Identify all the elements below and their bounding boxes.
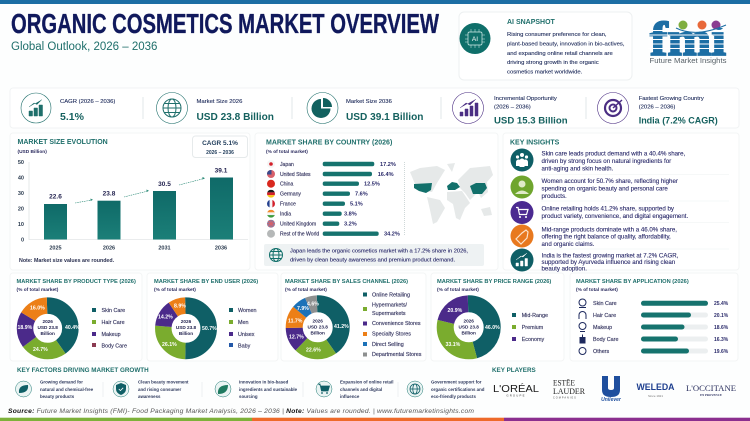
note: Note: Market size values are rounded.: [19, 258, 115, 264]
panel: application: [570, 273, 738, 361]
legend: Convenience Stores: [372, 321, 421, 327]
insight: women: [510, 176, 678, 200]
insight: India: supported by Ayurveda influence and rising clean: [542, 259, 676, 266]
KPI: fastest growing country: Fastest Growing Country: [639, 96, 704, 102]
donut chart: 46.0%: [485, 325, 500, 331]
icon: AI chip: AI: [472, 36, 478, 43]
KPI: incremental opportunity: [452, 92, 568, 126]
factor: government support: eco-friendly products: [431, 394, 476, 399]
donut chart: 20.9%: [448, 308, 463, 314]
donut chart: 50.7%: [202, 326, 217, 332]
legend: Makeup: [102, 332, 121, 338]
donut chart: USD 23.8: [176, 325, 197, 330]
legend: [92, 308, 127, 350]
insight: India: beauty adoption.: [542, 266, 587, 272]
legend: Skin Care: [102, 308, 125, 314]
factor: innovation: Innovation in bio-based: [239, 380, 289, 384]
legend: Economy: [522, 337, 544, 343]
bar chart: 2031: [158, 246, 171, 252]
bar chart: 0: [21, 238, 24, 244]
application labels: Skin Care: [593, 301, 617, 307]
donut chart: 11.7%: [288, 318, 303, 324]
KPI: CAGR: CAGR (2026 – 2036): [60, 99, 115, 105]
factor: online expansion: Expansion of online retail: [340, 380, 393, 384]
panel: sales channel: [281, 273, 426, 361]
donut chart: USD 23.8: [38, 325, 58, 330]
donut chart: [18, 306, 80, 353]
application values: [714, 301, 729, 355]
insight: mid-range: [510, 224, 677, 248]
unit label: (% of total market): [437, 287, 479, 293]
panel: key players: [492, 367, 736, 403]
donut chart: [158, 304, 217, 351]
bar chart: 2025: [49, 246, 62, 252]
factor: clean beauty: awareness: [138, 394, 161, 399]
country values: [344, 162, 400, 238]
factor: clean beauty: [113, 380, 189, 399]
country values: 3.2%: [344, 222, 357, 228]
application values: 16.3%: [714, 337, 729, 343]
CAGR callout: 2026 – 2036: [206, 150, 234, 156]
logo: L'Oreal: L'ORÉAL: [493, 382, 539, 395]
legend: Mid-Range: [522, 313, 548, 319]
legend: Departmental Stores: [372, 352, 422, 358]
KPI: market size 2036: USD 39.1 Billion: [346, 112, 423, 123]
KPI: market size 2036: Market Size 2036: [346, 99, 393, 105]
country values: 12.5%: [364, 182, 380, 188]
top bar: [0, 0, 750, 4]
donut chart: 8.9%: [174, 304, 186, 310]
insight: skin care: driven by strong focus on natural ingredients for: [542, 158, 671, 165]
legend: Premium: [522, 325, 544, 331]
application labels: Others: [593, 349, 609, 355]
bar chart: [18, 160, 248, 252]
CAGR callout: CAGR 5.1%: [202, 140, 238, 147]
heading: KEY INSIGHTS: [510, 140, 560, 146]
bar chart: 20: [18, 206, 24, 212]
text: AI snapshot summary: driving strong growth in the organic: [507, 60, 599, 66]
logo: Estee Lauder: LAUDER: [553, 386, 585, 396]
bar chart: 2036: [215, 246, 227, 252]
KPI: incremental opportunity: USD 15.3 Billion: [494, 116, 568, 126]
unit label: (% of total market): [285, 287, 327, 293]
application values: 20.1%: [714, 313, 729, 319]
country values: 17.2%: [380, 162, 396, 168]
donut chart: 26.1%: [162, 342, 177, 348]
unit label: (% of total market): [16, 287, 59, 293]
bar chart: 30.5: [158, 181, 171, 188]
heading: MARKET SHARE BY SALES CHANNEL (2026): [285, 279, 408, 285]
country labels: United States: [280, 172, 311, 178]
insight: skin care: anti-aging and skin health.: [542, 166, 613, 172]
donut chart: 33.1%: [446, 342, 461, 348]
panel: market size evolution: [10, 133, 250, 270]
panel: key insights: [503, 133, 739, 272]
text: AI snapshot summary: and expanding online retail channels are: [507, 51, 614, 57]
donut chart: Billion: [462, 330, 476, 336]
logo: L'Occitane: EN PROVENCE: [700, 393, 722, 397]
country labels: France: [280, 202, 296, 208]
insight: skin care: [510, 148, 685, 172]
heading: MARKET SHARE BY PRICE RANGE (2026): [437, 279, 551, 285]
donut chart: [445, 304, 500, 351]
KPI: market size 2026: Market Size 2026: [196, 99, 243, 105]
country labels: United Kingdom: [280, 222, 316, 228]
heading: market size evolution: MARKET SIZE EVOLUTION: [18, 139, 108, 146]
legend: Unisex: [238, 332, 255, 338]
logo: Estee Lauder: ESTĒE: [553, 378, 575, 388]
CAGR callout: [192, 136, 248, 158]
donut chart: USD 23.8: [459, 324, 479, 330]
legend: [229, 308, 256, 350]
factor: innovation: sourcing: [239, 394, 258, 399]
KPI: fastest growing country: India (7.2% CAGR): [639, 116, 718, 126]
donut chart: Billion: [41, 331, 55, 336]
unit label: (% of total market): [576, 287, 618, 293]
insight: skin care: Skin care leads product demand with a 40.4% share,: [542, 150, 685, 158]
KPI: market size 2026: USD 23.8 Billion: [196, 112, 274, 123]
country labels: Japan: [280, 162, 294, 168]
factor: natural demand: [16, 380, 94, 399]
KPI: fastest growing country: (2026 – 2036): [639, 104, 675, 110]
heading: AI snapshot: AI SNAPSHOT: [507, 19, 556, 26]
KPI: CAGR: [21, 93, 115, 123]
text: AI snapshot summary: plant-based beauty, innovation in bio-actives,: [507, 42, 625, 48]
bar chart: 22.6: [49, 194, 62, 200]
heading: KEY FACTORS DRIVING MARKET GROWTH: [17, 367, 149, 374]
KPI: CAGR: 5.1%: [60, 111, 85, 123]
donut chart: 22.6%: [306, 348, 321, 354]
heading: KEY PLAYERS: [492, 367, 536, 374]
bar chart: 23.8: [103, 190, 116, 198]
footer color bar: [0, 418, 750, 421]
legend: [512, 313, 548, 343]
bar chart: 39.1: [215, 168, 228, 174]
text: AI snapshot summary: Rising consumer preference for clean,: [507, 32, 607, 38]
insight: mid-range: offering the right balance of quality, affordability,: [542, 234, 671, 240]
logo: Future Market Insights: fmi: [650, 13, 726, 66]
legend: Supermarkets: [372, 311, 406, 317]
legend: Women: [238, 308, 256, 314]
factor: innovation: ingredients and sustainable: [239, 387, 298, 392]
insight: women: products.: [542, 193, 567, 200]
factor: innovation: [215, 380, 298, 399]
factor: government support: [407, 380, 485, 399]
legend: Specialty Stores: [372, 332, 411, 338]
insight: women: spending on organic beauty and personal care: [542, 186, 668, 192]
application bars: [641, 301, 708, 354]
factor: government support: organic certifications and: [431, 387, 485, 392]
donut chart: Billion: [311, 330, 325, 336]
application values: 19.6%: [714, 349, 729, 355]
callout: Japan leads: Japan leads the organic cosmetics market with a 17.2% share in 2026,: [290, 248, 468, 254]
donut chart: 2026: [312, 318, 323, 324]
country values: 7.6%: [355, 192, 368, 198]
donut chart: 14.2%: [158, 314, 173, 320]
legend: Baby: [238, 344, 251, 350]
heading: MARKET SHARE BY COUNTRY (2026): [266, 140, 392, 146]
insight: India: [510, 248, 679, 272]
country values: 5.1%: [350, 202, 363, 208]
donut chart: 40.4%: [65, 325, 80, 331]
logo: L'Oreal: GROUPE: [506, 394, 526, 398]
bar chart: 40: [18, 176, 24, 182]
logo: Future Market Insights: Future Market Insights: [650, 56, 727, 65]
factor: natural demand: beauty products: [40, 394, 75, 399]
logo: Weleda: WELEDA: [636, 382, 675, 393]
insight: online retailing: product variety, convenience, and digital engagement.: [542, 213, 688, 220]
factor: government support: Government support for: [431, 380, 482, 384]
logo: Weleda: [636, 382, 675, 398]
country labels: [280, 162, 319, 238]
country labels: India: [280, 212, 291, 218]
application labels: Body Care: [593, 337, 618, 343]
donut chart: 7.9%: [297, 306, 309, 312]
donut chart: 2026: [463, 318, 474, 324]
factor: clean beauty: Clean beauty movement: [138, 380, 189, 384]
legend: Body Care: [102, 344, 127, 350]
factor: natural demand: natural and chemical-free: [40, 387, 94, 392]
callout: Japan leads: [264, 244, 484, 266]
application labels: Makeup: [593, 325, 612, 331]
title: ORGANIC COSMETICS MARKET OVERVIEW: [11, 8, 439, 39]
donut chart: 18.9%: [18, 325, 33, 331]
country labels: China: [280, 182, 293, 188]
application labels: [593, 301, 618, 355]
application values: 18.6%: [714, 325, 729, 331]
factor: online expansion: influence: [340, 394, 360, 399]
donut chart: 2026: [181, 319, 192, 324]
flags: [267, 160, 275, 238]
KPI: incremental opportunity: (2026 – 2036): [494, 104, 531, 110]
logo: Unilever: Unilever: [601, 397, 622, 403]
bar chart: 10: [18, 222, 24, 228]
country labels: Germany: [280, 192, 301, 198]
donut chart: 41.2%: [334, 324, 349, 330]
donut chart: USD 23.8: [308, 324, 328, 330]
panel: price range: [431, 273, 564, 361]
insight: women: Women account for 50.7% share, reflecting higher: [542, 178, 678, 185]
legend: Hypermarkets/: [372, 302, 408, 308]
factor: online expansion: channels and digital: [340, 387, 382, 392]
KPI: market size 2036: [307, 92, 423, 124]
factor: online expansion: [316, 380, 393, 399]
legend: Online Retailing: [372, 292, 410, 298]
source line: Source: Future Market Insights (FMI)- Food Packaging Market Analysis, 2026 – 2036 | Note: Values are rounded. | www.futuremarketinsights.com: [8, 408, 474, 415]
legend: Direct Selling: [372, 342, 404, 348]
logo: Estee Lauder: COMPANIES: [553, 396, 577, 400]
KPI: market size 2026: [156, 92, 274, 124]
country values: 34.2%: [384, 232, 400, 238]
country values: 16.4%: [378, 172, 394, 178]
panel: key factors: [16, 367, 485, 399]
donut chart: Billion: [179, 331, 193, 336]
country values: 3.8%: [344, 212, 357, 218]
donut chart: 2026: [42, 319, 53, 324]
heading: MARKET SHARE BY END USER (2026): [154, 279, 258, 285]
unit label: (USD Billion): [18, 149, 47, 155]
donut chart: [288, 302, 349, 354]
bar chart: 30: [18, 191, 24, 197]
donut chart: 24.7%: [33, 347, 48, 353]
logo: Estee Lauder: [553, 378, 585, 400]
panel: market share by country: [255, 133, 498, 270]
donut chart: 16.0%: [30, 306, 45, 312]
logo: L'Occitane: L'OCCITANE: [686, 383, 736, 393]
logo: Weleda: Since 1921: [648, 394, 663, 398]
panel: end user: [147, 273, 278, 361]
application values: 25.4%: [714, 301, 729, 307]
heading: MARKET SHARE BY PRODUCT TYPE (2026): [16, 279, 136, 285]
panel: product type: [10, 273, 142, 361]
legend: Men: [238, 320, 248, 326]
world map: [410, 163, 493, 224]
heading: MARKET SHARE BY APPLICATION (2026): [576, 279, 689, 285]
unit label: (% of total market): [266, 149, 308, 155]
application labels: Hair Care: [593, 313, 616, 319]
logo: Unilever: [601, 376, 622, 403]
factor: natural demand: Growing demand for: [40, 380, 83, 384]
legend: Hair Care: [102, 320, 125, 326]
bar chart: 50: [18, 160, 24, 166]
country labels: Rest of the World: [280, 232, 319, 238]
KPI: fastest growing country: [598, 92, 718, 126]
unit label: (% of total market): [154, 287, 196, 293]
insight: online retailing: Online retailing holds 41.2% share, supported by: [542, 206, 675, 212]
factor: clean beauty: and rising consumer: [138, 387, 181, 392]
insight: India: India is the fastest growing market at 7.2% CAGR,: [542, 252, 679, 260]
insight: online retailing: [510, 201, 688, 224]
KPI strip: [10, 88, 739, 128]
subtitle: Global Outlook, 2026 – 2036: [11, 41, 157, 53]
country bars: [323, 162, 379, 236]
insight: mid-range: Mid-range products dominate with a 46.0% share,: [542, 226, 677, 234]
application icons: [579, 299, 586, 354]
text: AI snapshot summary: cosmetics market worldwide.: [507, 70, 583, 76]
insight: mid-range: and organic claims.: [542, 241, 595, 248]
bar chart: 2026: [103, 246, 115, 252]
donut chart: 4.6%: [307, 302, 319, 308]
KPI: incremental opportunity: Incremental Opportunity: [494, 96, 557, 102]
icon: AI chip: [460, 23, 490, 54]
callout: Japan leads: driven by clean beauty awareness and premium product demand.: [290, 258, 455, 264]
legend: [363, 292, 422, 358]
panel: AI snapshot: [459, 12, 632, 80]
donut chart: 12.7%: [289, 334, 304, 340]
